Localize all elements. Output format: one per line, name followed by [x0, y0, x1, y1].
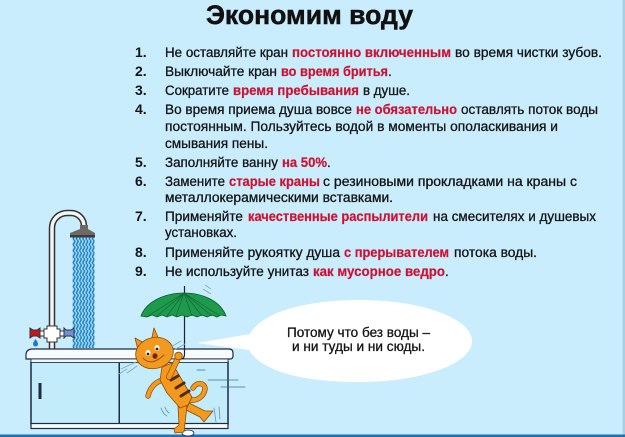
- numbered list: [135, 44, 602, 279]
- item 9: .: [445, 264, 449, 279]
- item 3: время пребывания: [233, 83, 359, 98]
- item 1: во время чистки зубов.: [455, 45, 602, 60]
- cat head: [135, 328, 161, 354]
- cat raised arm: [169, 358, 178, 377]
- item 1: Не оставляйте кран: [165, 45, 288, 60]
- item 1: [135, 44, 602, 60]
- item 9: [135, 263, 449, 279]
- item 6: старые краны: [229, 174, 320, 189]
- cat white shoe: [182, 430, 194, 436]
- item 4: постоянным. Пользуйтесь водой в моменты ополаскивания и: [165, 119, 558, 134]
- item 2: 2.: [135, 63, 147, 79]
- title: Экономим воду: [206, 0, 413, 30]
- cat tail: [190, 384, 205, 400]
- motion lines: [119, 341, 185, 374]
- item 7: установках.: [165, 225, 237, 240]
- item 8: с прерывателем: [344, 245, 449, 260]
- item 9: Не используйте унитаз: [165, 264, 309, 279]
- icon: shower water: [72, 237, 94, 348]
- icon: green umbrella: [141, 285, 226, 359]
- cat left leg: [174, 406, 187, 433]
- item 5: 5.: [135, 154, 147, 170]
- item 5: [135, 154, 331, 170]
- item 1: 1.: [135, 44, 147, 60]
- item 4: Во время приема душа вовсе: [165, 102, 352, 117]
- item 4: не обязательно: [356, 102, 457, 117]
- item 7: Применяйте: [165, 209, 243, 224]
- item 6: Замените: [165, 174, 225, 189]
- item 5: Заполняйте ванну: [165, 155, 278, 170]
- item 4: оставлять поток воды: [461, 102, 598, 117]
- cat body: [160, 363, 192, 408]
- cat stripes: [171, 376, 189, 396]
- item 4: 4.: [135, 101, 147, 117]
- item 8: Применяйте рукоятку душа: [165, 245, 340, 260]
- item 2: .: [388, 64, 392, 79]
- item 4: смывания пены.: [165, 136, 268, 151]
- item 8: [135, 244, 537, 260]
- icon: mixer taps: [30, 326, 74, 346]
- icon: cat: [119, 328, 245, 436]
- bubble text: Потому что без воды –: [287, 325, 430, 340]
- item 7: качественные распылители: [248, 209, 428, 224]
- speech bubble: [197, 300, 472, 382]
- item 7: [135, 208, 596, 240]
- bubble text: [287, 325, 430, 354]
- item 3: [135, 82, 410, 98]
- icon: shower pipe: [52, 213, 84, 349]
- item 6: [135, 173, 577, 205]
- bubble text: и ни туды и ни сюды.: [292, 339, 425, 354]
- item 9: как мусорное ведро: [313, 264, 445, 279]
- item 6: с резиновыми прокладками на краны с: [323, 174, 577, 189]
- item 9: 9.: [135, 263, 147, 279]
- item 7: на смесителях и душевых: [433, 209, 596, 224]
- item 6: 6.: [135, 173, 147, 189]
- item 3: в душе.: [363, 83, 410, 98]
- item 7: 7.: [135, 208, 147, 224]
- bathtub: [26, 349, 233, 428]
- cat right leg: [186, 403, 213, 422]
- item 5: .: [327, 155, 331, 170]
- item 2: Выключайте кран: [165, 64, 277, 79]
- item 4: [135, 101, 598, 151]
- item 6: металлокерамическими вставками.: [165, 190, 393, 205]
- item 3: Сократите: [165, 83, 229, 98]
- item 2: [135, 63, 392, 79]
- icon: shower head: [70, 225, 95, 238]
- item 2: во время бритья: [281, 64, 388, 79]
- item 3: 3.: [135, 82, 147, 98]
- item 1: постоянно включенным: [292, 45, 451, 60]
- item 8: потока воды.: [454, 245, 537, 260]
- item 8: 8.: [135, 244, 147, 260]
- cat left arm: [148, 380, 163, 396]
- item 5: на 50%: [282, 155, 327, 170]
